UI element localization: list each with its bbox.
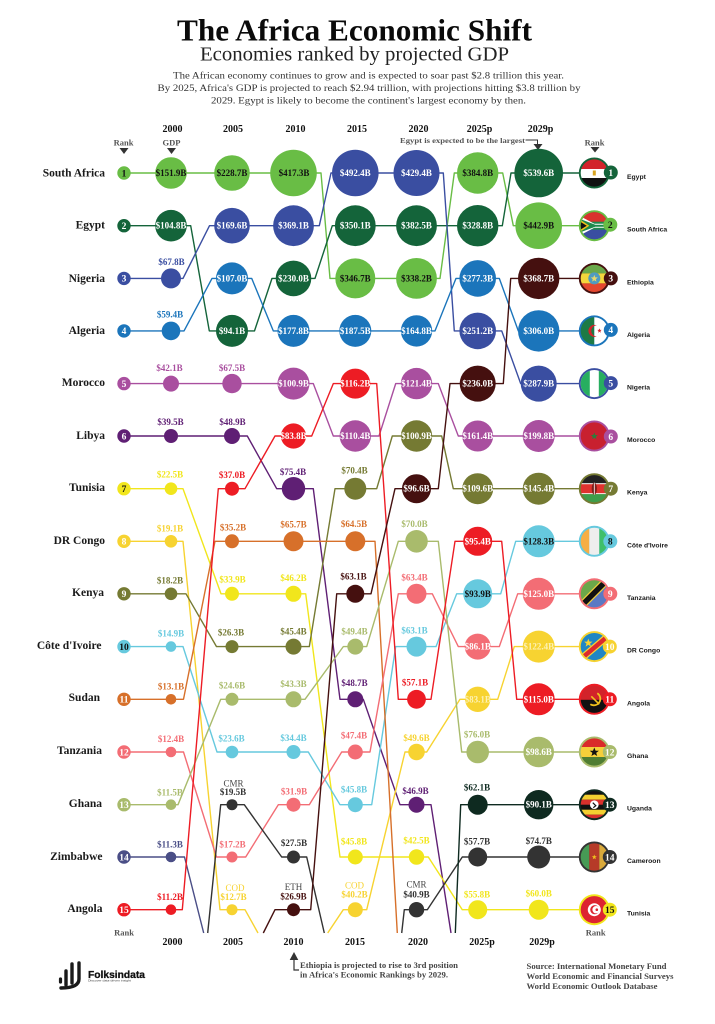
left rank badges: 2: [122, 222, 127, 232]
column 2020: $42.5B: [403, 836, 430, 846]
column 2005: $94.1B: [219, 326, 245, 336]
column 2005: $24.6B: [219, 680, 245, 690]
line: Angola: [124, 384, 594, 910]
annotation: Egypt expected to be largest: [400, 136, 542, 150]
GDP marker: [163, 138, 180, 154]
line: DR Congo early: [124, 541, 258, 933]
left rank badges: [117, 166, 131, 916]
logo: Folksindata: Folksindata: [88, 970, 145, 981]
line: Nigeria: [124, 173, 594, 384]
column 2020: $57.1B: [402, 677, 428, 687]
line: Tanzania: [124, 594, 594, 857]
flag: Tunisia: [579, 894, 617, 925]
column 2000: $18.2B: [157, 575, 183, 585]
left country names: [37, 168, 105, 915]
flag: Nigeria: [579, 368, 618, 399]
label: Cameroon: Cameroon: [627, 858, 661, 865]
flag: Uganda: [579, 789, 617, 820]
flag: Ghana: 12: [605, 748, 615, 758]
column 2000: $39.5B: [157, 417, 184, 427]
source: World Economic Outlook Database: [526, 982, 658, 991]
column 2025p: $109.6B: [462, 484, 493, 494]
left country names: Libya: [76, 430, 105, 442]
column 2025p: $76.0B: [464, 730, 490, 740]
column 2015: $116.2B: [340, 379, 370, 389]
column 2029p: $306.0B: [523, 326, 554, 336]
left rank badges: 14: [119, 853, 129, 863]
left country names: Algeria: [69, 325, 105, 337]
column 2029p: $442.9B: [523, 221, 554, 231]
line: Egypt: [124, 173, 594, 331]
left country names: Tunisia: [69, 482, 105, 494]
column 2020: $96.6B: [403, 484, 430, 494]
column 2029p: $145.4B: [523, 484, 554, 494]
line: Cameroon early: [208, 805, 324, 933]
left rank marker: [114, 138, 134, 154]
column 2029p: $115.0B: [524, 694, 554, 704]
label: Morocco: Morocco: [627, 437, 655, 444]
line: Cote d'Ivoire: [124, 541, 594, 805]
bottom year axis: 2029p: [529, 937, 555, 948]
column 2015: $45.8B: [341, 785, 367, 795]
bottom right rank label: Rank: [586, 928, 606, 938]
column 2005: COD: [225, 883, 245, 893]
column 2015: $346.7B: [340, 273, 371, 283]
column 2025p: $83.1B: [465, 694, 491, 704]
flag: South Africa: 2: [608, 221, 613, 231]
column 2020: $164.8B: [401, 326, 432, 336]
column 2025p: $251.2B: [462, 326, 493, 336]
line: Tunisia: [124, 489, 594, 910]
label: Egypt: Egypt: [627, 174, 647, 181]
column 2010: ETH: [285, 882, 303, 892]
column 2000: $104.8B: [156, 221, 186, 231]
column 2015: $45.8B: [341, 836, 367, 846]
left rank badges: 10: [119, 643, 129, 653]
flag: Ethiopia: [579, 263, 618, 294]
column 2020: $338.2B: [401, 273, 432, 283]
column 2005: $26.3B: [218, 627, 244, 637]
flag: Cameroon: [579, 842, 617, 872]
left rank badges: 15: [119, 906, 129, 916]
left rank badges: 9: [122, 590, 127, 600]
column 2025p: $62.1B: [464, 783, 490, 793]
left rank badges: 3: [122, 275, 127, 285]
flag: Tunisia: 15: [605, 906, 615, 916]
column 2010: $27.5B: [281, 838, 307, 848]
column 2020: $429.4B: [401, 168, 432, 178]
column 2010: $46.2B: [280, 573, 307, 583]
flag: Algeria: [579, 315, 618, 346]
top year axis: 2029p: [528, 124, 554, 135]
arrow and Ethiopia note: [290, 952, 459, 980]
column 2029p: $122.4B: [523, 642, 554, 652]
left country names: Côte d'Ivoire: [37, 640, 102, 652]
line: Zimbabwe: [124, 857, 204, 933]
column 2029p: $128.3B: [523, 536, 554, 546]
label: Kenya: Kenya: [627, 490, 648, 497]
flag: Cote d'Ivoire: 8: [608, 538, 613, 548]
label: Ethiopia: Ethiopia: [627, 279, 654, 286]
left country names: Sudan: [69, 692, 101, 704]
column 2000: $11.2B: [157, 892, 183, 902]
left rank badges: 5: [122, 380, 127, 390]
column 2010: $369.1B: [278, 221, 309, 231]
flag: Tanzania: [579, 578, 617, 609]
column 2010: $100.9B: [278, 379, 309, 389]
left rank badges: 1: [122, 170, 127, 180]
column 2000: $13.1B: [158, 681, 184, 691]
column 2025p: $57.7B: [464, 836, 490, 846]
column 2020: $49.6B: [403, 733, 430, 743]
column 2010: [270, 150, 317, 916]
column 2025p: $277.3B: [462, 273, 493, 283]
arrow and Ethiopia note: in Africa's Economic Rankings by 2029.: [300, 970, 448, 980]
column 2010: $75.4B: [280, 467, 306, 477]
left rank badges: 13: [119, 801, 129, 811]
line: Morocco: [124, 384, 594, 436]
column 2015: $492.4B: [340, 168, 371, 178]
bottom year axis: 2015: [345, 937, 365, 948]
line: Sudan: [124, 541, 397, 933]
column 2005: $48.9B: [219, 417, 246, 427]
flag: Egypt: [579, 158, 618, 188]
left country names: Egypt: [76, 220, 105, 232]
bottom year axis: 2025p: [469, 937, 495, 948]
left rank badges: 6: [122, 432, 127, 442]
flag: DR Congo: [579, 631, 617, 662]
line: South Africa: [124, 173, 594, 278]
flag: Nigeria: 5: [608, 379, 613, 389]
rank connector lines: [124, 173, 594, 933]
column 2010: $26.9B: [280, 891, 307, 901]
flag: Kenya: [579, 473, 618, 504]
column 2005: $107.0B: [217, 273, 247, 283]
column 2029p: $60.0B: [526, 888, 552, 898]
flag: Kenya: 7: [608, 485, 613, 495]
column 2010: $65.7B: [280, 519, 307, 529]
flag: Uganda: 13: [605, 801, 615, 811]
left country names: DR Congo: [54, 535, 105, 547]
column 2010: $31.9B: [281, 786, 307, 796]
logo: Folksindata: [60, 963, 145, 988]
bottom left rank label: Rank: [114, 928, 134, 938]
column 2010: $177.8B: [278, 326, 309, 336]
column 2000: $42.1B: [156, 363, 183, 373]
column 2029p: $287.9B: [523, 379, 554, 389]
column 2005: $17.2B: [219, 839, 246, 849]
annotation: Egypt expected to be largest: Egypt is expected to be the largest: [400, 136, 525, 145]
column 2020: $382.5B: [401, 221, 432, 231]
bottom year axis: 2005: [223, 937, 243, 948]
column 2000: $59.4B: [157, 310, 183, 320]
column 2000: $11.3B: [157, 839, 183, 849]
column 2015: $187.5B: [340, 326, 371, 336]
column 2015: $63.1B: [340, 571, 367, 581]
flag: Cameroon: 14: [605, 853, 615, 863]
intro paragraph: The African economy continues to grow and is expected to soar past $2.8 trillion this year.: [173, 70, 564, 82]
left rank badges: 7: [122, 485, 127, 495]
flag: Ghana: [579, 736, 617, 768]
left rank marker: Rank: [114, 138, 134, 148]
label: Tunisia: Tunisia: [627, 910, 651, 918]
column 2020: CMR: [406, 880, 427, 890]
top year axis: 2025p: [467, 124, 493, 135]
column 2029p: [514, 149, 563, 920]
intro paragraph: By 2025, Africa's GDP is projected to reach $2.94 trillion, with projections hitting $3.8 trillion by: [158, 83, 581, 94]
column 2015: COD: [345, 880, 364, 890]
flag: Algeria: 4: [608, 326, 613, 336]
column 2029p: $98.6B: [526, 747, 552, 757]
column 2020: $63.4B: [401, 572, 428, 582]
column 2015: $47.4B: [341, 731, 367, 741]
source: Source: International Monetary Fund: [526, 962, 667, 971]
line: Uganda: [455, 805, 594, 933]
column 2015: $40.2B: [341, 890, 368, 900]
source: World Economic and Financial Surveys: [526, 972, 674, 981]
column 2000: $19.1B: [157, 524, 183, 534]
top year axis: 2000: [162, 124, 182, 135]
column 2025p: $384.8B: [462, 168, 493, 178]
column 2000: $151.9B: [156, 168, 186, 178]
column 2020: $46.9B: [402, 786, 429, 796]
column 2000: $22.5B: [157, 470, 183, 480]
top year axis: 2005: [223, 124, 243, 135]
column 2010: $45.4B: [280, 626, 307, 636]
column 2020: $70.0B: [401, 519, 428, 529]
left rank badges: 8: [122, 538, 127, 548]
column 2005: [214, 155, 250, 915]
column 2010: $83.8B: [280, 431, 307, 441]
line: Libya: [124, 436, 451, 933]
column 2025p: $55.8B: [464, 890, 490, 900]
column 2029p: $368.7B: [523, 273, 554, 283]
label: South Africa: South Africa: [627, 227, 667, 234]
column 2005: $33.9B: [219, 575, 246, 585]
column 2025p: $328.8B: [462, 221, 493, 231]
line: Algeria: [124, 278, 594, 331]
GDP marker: GDP: [163, 138, 180, 148]
title: The Africa Economic Shift: [177, 14, 533, 48]
line: Ethiopia: [263, 278, 594, 933]
left country names: South Africa: [43, 168, 105, 180]
line: Kenya: [124, 436, 594, 647]
column 2025p: $236.0B: [462, 379, 493, 389]
label: Tanzania: Tanzania: [627, 595, 656, 602]
arrow and Ethiopia note: Ethiopia is projected to rise to 3rd position: [300, 961, 459, 970]
column 2000: $11.5B: [157, 787, 183, 797]
intro paragraph: [158, 70, 581, 106]
logo: Folksindata: Discover data-driven insight: [88, 978, 131, 982]
left country names: Angola: [67, 903, 103, 915]
label: Uganda: Uganda: [627, 806, 652, 812]
column 2005: $228.7B: [217, 168, 247, 178]
column 2005: $37.0B: [219, 470, 245, 480]
column 2005: $23.6B: [218, 734, 245, 744]
column 2015: $350.1B: [340, 221, 371, 231]
label: DR Congo: DR Congo: [627, 648, 660, 655]
line: DR Congo late: [328, 647, 594, 933]
top year axis: 2020: [408, 124, 428, 135]
column 2025p: [457, 152, 498, 919]
column 2015: $64.5B: [341, 519, 367, 529]
flag: Angola: 11: [605, 696, 615, 706]
bottom year axis: 2020: [408, 937, 428, 948]
flag: Cote d'Ivoire: [579, 526, 617, 557]
column 2005: $67.5B: [219, 363, 245, 373]
column 2010: $417.3B: [279, 168, 309, 178]
flag: Egypt: 1: [608, 169, 613, 179]
bottom year axis: 2010: [284, 937, 304, 948]
label: Cote d'Ivoire: Côte d'Ivoire: [627, 542, 668, 550]
column 2029p: $90.1B: [526, 800, 552, 810]
column 2000: $67.8B: [158, 257, 185, 267]
bottom year axis: 2000: [162, 937, 182, 948]
left country names: Morocco: [62, 377, 105, 389]
column 2015: $110.4B: [340, 431, 370, 441]
top year axis: 2015: [347, 124, 367, 135]
column 2025p: $95.4B: [465, 536, 491, 546]
column 2010: $34.4B: [280, 733, 307, 743]
flag: Morocco: [579, 420, 618, 452]
flag: Ethiopia: 3: [608, 275, 613, 285]
flag: Morocco: 6: [608, 433, 613, 443]
right rank marker: [585, 138, 605, 152]
flag: DR Congo: 10: [605, 643, 615, 653]
column 2005: $169.6B: [217, 221, 247, 231]
column 2000: $14.9B: [158, 629, 184, 639]
label: Algeria: Algeria: [627, 332, 650, 339]
column 2029p: $199.8B: [523, 431, 554, 441]
column 2020: [394, 150, 440, 917]
left country names: Kenya: [72, 587, 104, 599]
column 2025p: $86.1B: [465, 642, 491, 652]
column 2020: $40.9B: [403, 889, 430, 899]
column 2029p: $539.6B: [523, 168, 554, 178]
top year axis: 2010: [286, 124, 306, 135]
column 2015: $70.4B: [341, 466, 368, 476]
column 2025p: $93.9B: [465, 589, 491, 599]
column 2025p: $161.4B: [462, 431, 493, 441]
column 2020: $100.9B: [401, 431, 432, 441]
intro paragraph: 2029. Egypt is likely to become the continent's largest economy by then.: [211, 96, 526, 106]
column 2015: $48.7B: [341, 678, 368, 688]
column 2000: [155, 157, 187, 915]
left country names: Ghana: [69, 798, 102, 810]
subtitle: Economies ranked by projected GDP: [200, 44, 509, 66]
column 2015: $49.4B: [341, 627, 368, 637]
flag: Tanzania: 9: [608, 590, 613, 600]
line: Cameroon late: [402, 857, 594, 933]
left rank badges: 4: [122, 327, 127, 337]
column 2015: [332, 150, 379, 917]
source: [526, 962, 674, 991]
right rank marker: Rank: [585, 138, 605, 148]
column 2010: $230.0B: [278, 273, 309, 283]
flag: South Africa: [579, 210, 617, 241]
column 2005: CMR: [223, 779, 244, 789]
left rank badges: 12: [119, 748, 129, 758]
column 2005: $12.7B: [220, 892, 247, 902]
label: Angola: Angola: [627, 700, 650, 707]
column 2010: $43.3B: [280, 679, 307, 689]
top year axis: [162, 124, 554, 135]
left country names: Zimbabwe: [50, 851, 102, 863]
column 2029p: $125.0B: [523, 589, 554, 599]
column 2020: $63.1B: [401, 626, 428, 636]
label: Ghana: Ghana: [627, 753, 648, 760]
column 2005: $19.5B: [220, 787, 246, 797]
column 2005: $35.2B: [220, 523, 246, 533]
bottom year axis: [162, 937, 555, 948]
left country names: Tanzania: [57, 745, 102, 757]
column 2020: $121.4B: [401, 379, 432, 389]
column 2029p: $74.7B: [526, 836, 552, 846]
label: Nigeria: Nigeria: [627, 384, 650, 392]
left country names: Nigeria: [69, 273, 105, 285]
column 2000: $12.4B: [158, 734, 184, 744]
left rank badges: 11: [120, 696, 129, 706]
flag: Angola: [579, 684, 617, 715]
line: Ghana: [124, 541, 594, 805]
